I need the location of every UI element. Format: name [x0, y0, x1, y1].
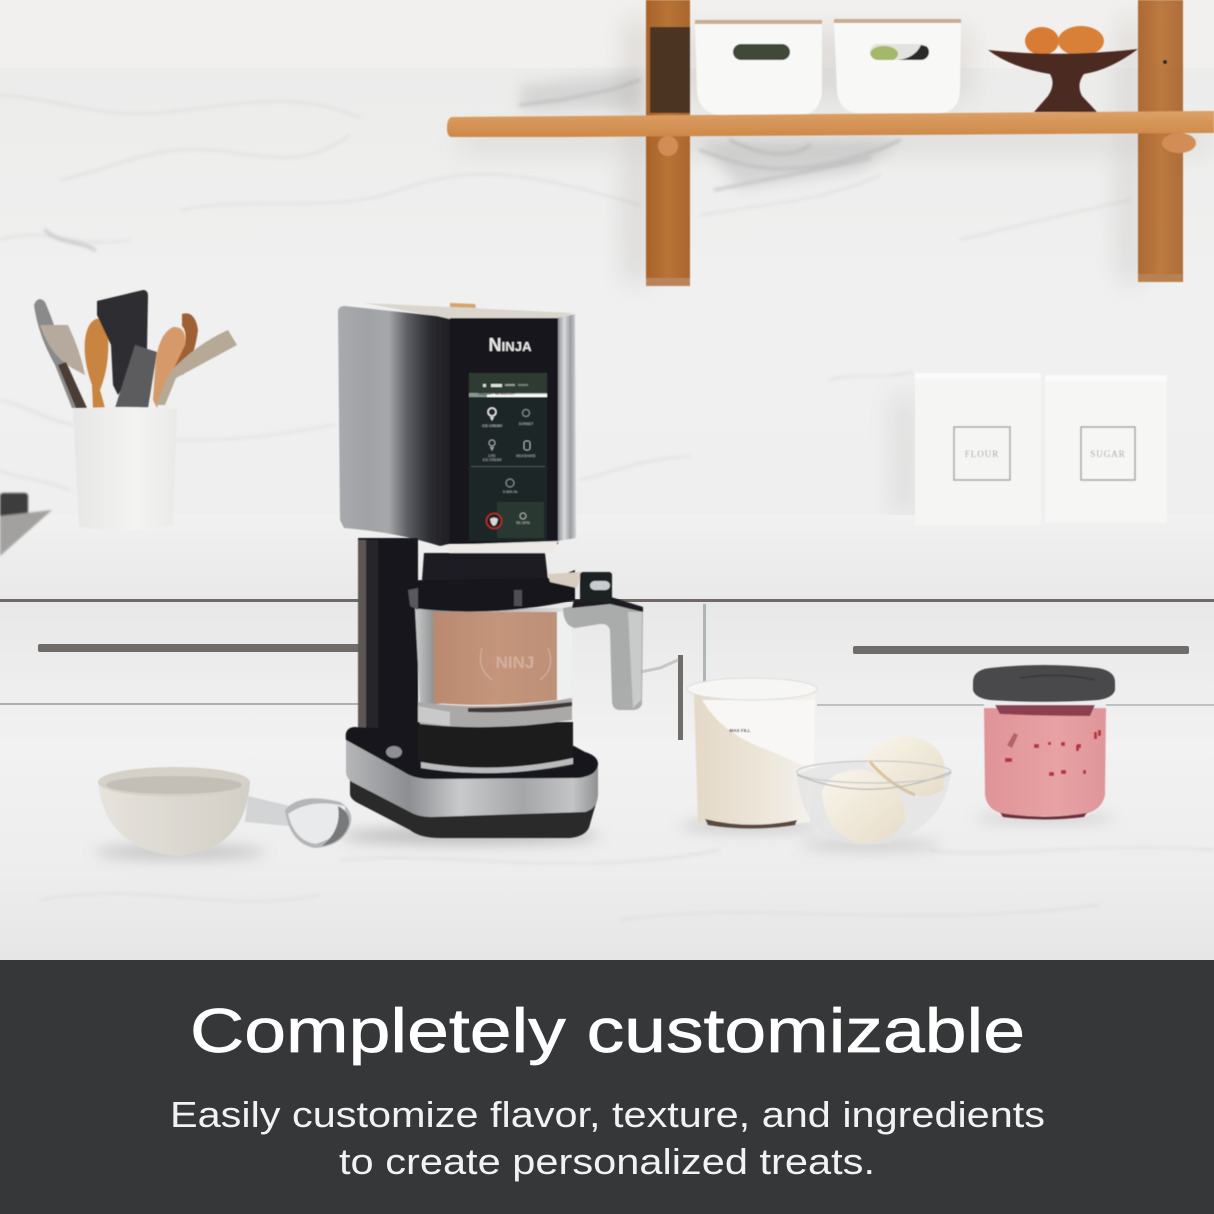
base silver band [346, 736, 598, 817]
sugar canister: SUGAR [1090, 449, 1126, 459]
object shadows on counter [95, 812, 1115, 859]
white storage box right [834, 19, 961, 113]
power button [486, 514, 502, 528]
marble mottling [520, 72, 900, 188]
Ninja logo: NINJA [488, 335, 532, 355]
left bracket [646, 0, 690, 286]
utensils [34, 290, 237, 408]
base black plate [346, 727, 598, 779]
right bracket [1138, 0, 1183, 282]
program icon: sorbet: SORBET [519, 422, 534, 426]
heading: Completely customizable [190, 997, 1025, 1066]
subtitle [170, 1094, 1045, 1182]
jar black lower base [418, 722, 573, 773]
utensil crock [34, 290, 237, 530]
shelf pegs [658, 133, 1196, 156]
program icon: mix-in [503, 479, 518, 494]
right silver trim [558, 314, 576, 541]
fruit bowl with oranges [988, 26, 1138, 112]
dark caption band [0, 960, 1214, 1214]
wall shadows [460, 20, 1210, 515]
jar ring [418, 698, 572, 727]
shelf plank [447, 111, 1214, 137]
program icon: lite ice cream: ICE CREAM [483, 458, 502, 462]
jar glass [415, 608, 572, 705]
jar chocolate contents [433, 612, 557, 705]
program icon: mix-in: X-MIX-IN [503, 490, 518, 494]
upper collar [422, 553, 548, 580]
jar grey lid [973, 665, 1115, 702]
cabinets [0, 599, 1214, 740]
program icon: lite ice cream [483, 440, 502, 462]
ice cream scoop [245, 796, 351, 848]
base machine [346, 727, 598, 838]
re-spin icon: RE-SPIN [516, 521, 530, 525]
head bottom lip [445, 541, 558, 554]
crock body [73, 407, 177, 530]
program icon: milkshake [516, 441, 536, 458]
marble veins [0, 80, 1130, 490]
program icon: milkshake: MILKSHAKE [516, 454, 536, 458]
upper scoop [864, 736, 945, 796]
white mixing bowl [98, 767, 250, 856]
sugar canister [1045, 375, 1167, 523]
jar lid [406, 570, 575, 612]
program icon: sorbet [519, 410, 534, 426]
embossed jar logo: NINJ [496, 653, 534, 672]
program icon: ice cream: ICE CREAM [482, 424, 502, 428]
glass bowl with ice cream scoops [797, 736, 951, 845]
lower scoop [822, 770, 905, 843]
left silver housing [338, 306, 450, 546]
neck column [358, 538, 418, 738]
base underside [350, 776, 597, 838]
left drawer handle [38, 644, 360, 652]
flour canister: FLOUR [965, 449, 999, 459]
wood shelf unit [447, 0, 1214, 286]
subtitle: Easily customize flavor, texture, and ingredients [170, 1094, 1045, 1135]
wall backdrop [0, 0, 1214, 518]
re-spin icon [516, 513, 530, 525]
program icon: ice cream [482, 408, 502, 428]
right drawer handle [853, 646, 1189, 654]
max fill mark: MAX FILL [729, 728, 751, 733]
stove corner [0, 493, 52, 556]
flour canister [915, 373, 1041, 525]
control panel [469, 373, 547, 541]
front counter [0, 740, 1214, 962]
black control face [450, 318, 558, 544]
strawberry pint jar [973, 665, 1115, 820]
jar handle [563, 572, 643, 710]
flour and sugar canisters [915, 373, 1167, 525]
back counter [0, 515, 1214, 600]
lid top of machine head [365, 303, 573, 319]
milk pint jar [687, 678, 817, 828]
white storage box left [695, 20, 822, 115]
ice cream machine [338, 303, 643, 838]
program icon: lite ice cream: LITE [488, 454, 496, 458]
control panel: CREAMIFY TECHNOLOGY [478, 392, 515, 396]
subtitle: to create personalized treats. [339, 1141, 875, 1182]
